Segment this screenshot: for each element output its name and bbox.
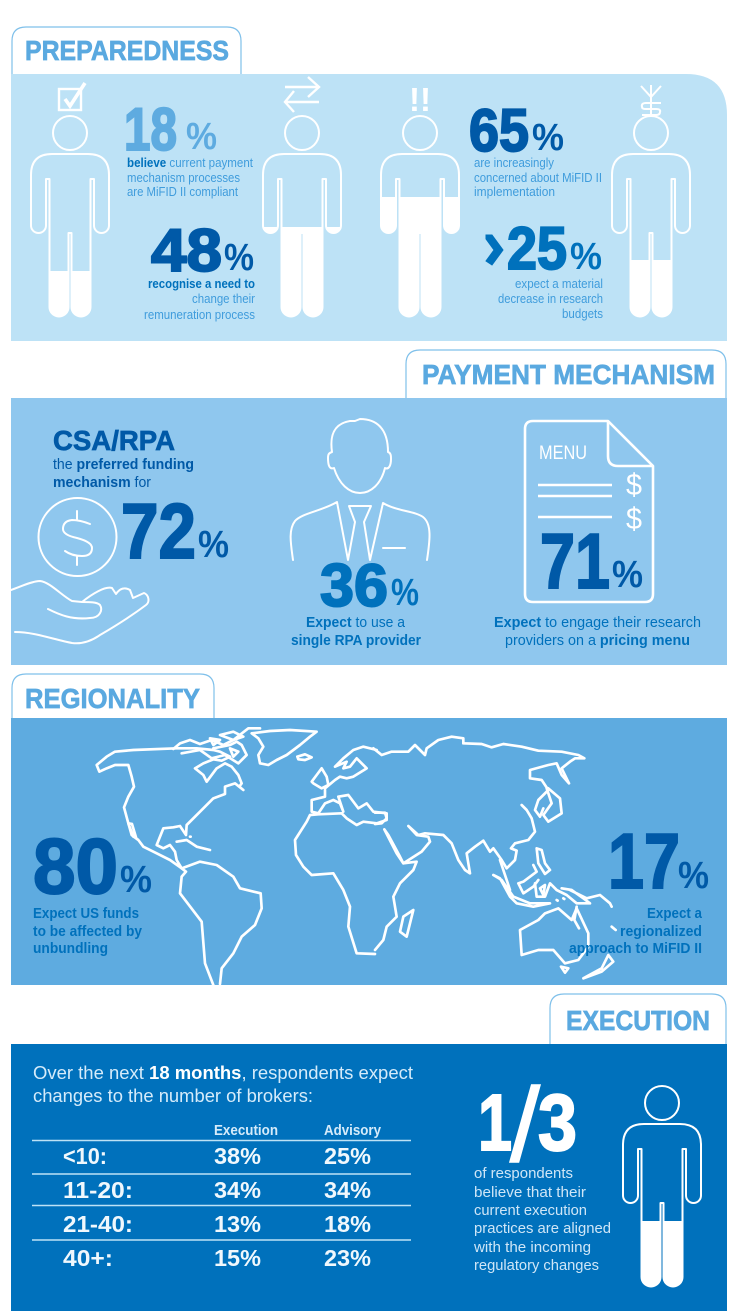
text: single RPA provider: single RPA provider xyxy=(291,633,421,649)
person 48 percent xyxy=(262,115,342,318)
stat: 36 percent xyxy=(320,552,419,619)
stat: greater than 25 percent xyxy=(486,215,602,282)
text: concerned xyxy=(474,155,602,199)
icon: exchange arrows xyxy=(285,77,319,112)
panel: payment mechanism xyxy=(11,350,727,665)
icon: businessman xyxy=(291,419,430,560)
table: broker changes: 18% xyxy=(324,1211,371,1237)
text: recognise: recognise a need to xyxy=(148,276,255,291)
table: broker changes: 23% xyxy=(324,1245,371,1271)
text: research budgets: expect a material xyxy=(515,276,603,291)
icon: menu document: $ xyxy=(626,467,642,502)
stat: 65 percent: % xyxy=(532,117,564,159)
text: intro: changes to the number of brokers: xyxy=(33,1085,313,1106)
stat: 65 percent: 65 xyxy=(469,97,529,164)
text: respondents: with the incoming xyxy=(473,1240,591,1256)
stat: 48 percent: 48 xyxy=(151,217,222,284)
text: regionalized approach: regionalized xyxy=(620,924,702,940)
stat: 71 percent: 71 xyxy=(540,517,610,605)
stat: greater than 25 percent: % xyxy=(570,236,602,278)
panel background: execution xyxy=(11,1044,727,1311)
icon: dollar coin xyxy=(38,498,116,576)
stat: 72 percent: % xyxy=(198,524,229,566)
icon: menu document xyxy=(525,421,653,602)
panel background: payment mechanism xyxy=(11,398,727,665)
text: pricing menu: providers on a pricing menu xyxy=(505,633,690,649)
stat: 80 percent: 80 xyxy=(33,822,118,910)
stat: 80 percent: % xyxy=(120,859,152,901)
table: broker changes: 34% xyxy=(324,1177,371,1203)
heading tab: preparedness xyxy=(12,27,241,75)
stat: greater than 25 percent: 25 xyxy=(507,215,567,282)
person one third xyxy=(622,1085,702,1288)
text: believe: believe current payment xyxy=(127,155,253,170)
text: believe: are MiFID II compliant xyxy=(127,184,238,199)
heading tab: regionality xyxy=(12,674,214,719)
table: broker changes: 34% xyxy=(214,1177,261,1203)
text: intro: Over the next 18 months, respondents expect xyxy=(33,1062,413,1083)
stat: one third xyxy=(478,1067,577,1184)
table: broker changes: 11-20: xyxy=(63,1177,133,1203)
text: concerned: implementation xyxy=(474,184,555,199)
text: believe: mechanism processes xyxy=(127,170,240,185)
stat: 48 percent: % xyxy=(224,237,254,279)
text: US funds: unbundling xyxy=(33,941,108,957)
table: broker changes: 15% xyxy=(214,1245,261,1271)
text: preferred funding xyxy=(53,457,194,491)
stat: 17 percent: 17 xyxy=(608,817,680,905)
icon: open hand xyxy=(11,581,148,643)
panel: preparedness xyxy=(11,27,727,341)
icon: dollar with down arrow xyxy=(641,85,661,115)
text: single RPA provider: Expect to use a xyxy=(306,615,406,631)
stat: 71 percent: % xyxy=(612,554,643,596)
text: research budgets xyxy=(498,276,603,321)
heading tab: regionality: REGIONALITY xyxy=(25,683,200,714)
table: broker changes: 13% xyxy=(214,1211,261,1237)
text: respondents: practices are aligned xyxy=(474,1221,611,1237)
panel background: preparedness xyxy=(11,74,727,341)
text: US funds: Expect US funds xyxy=(33,906,139,922)
text: recognise xyxy=(144,276,256,322)
text: pricing menu xyxy=(494,615,701,649)
stat: one third: 3 xyxy=(538,1078,577,1167)
heading tab: execution xyxy=(550,994,726,1045)
text: concerned: concerned about MiFID II xyxy=(474,170,602,185)
person greater than 25 percent xyxy=(611,116,691,318)
stat: 36 percent: 36 xyxy=(320,552,388,619)
stat: 17 percent: % xyxy=(678,855,709,897)
text: regionalized approach: Expect a xyxy=(647,906,703,922)
text: preferred funding: mechanism for xyxy=(53,475,151,491)
text: regionalized approach: approach to MiFID II xyxy=(569,941,702,957)
heading: CSA/RPA: CSA/RPA xyxy=(53,425,175,456)
text: pricing menu: Expect to engage their research xyxy=(494,615,701,631)
table: broker changes xyxy=(32,1123,411,1271)
table: broker changes: 38% xyxy=(214,1143,261,1169)
text: respondents xyxy=(473,1166,611,1274)
person 18 percent xyxy=(30,115,110,318)
icon: menu document: $ xyxy=(626,501,642,536)
stat: one third: / xyxy=(510,1067,541,1184)
stat: 18 percent: % xyxy=(186,116,217,158)
text: recognise: remuneration process xyxy=(144,307,255,322)
text: regionalized approach xyxy=(569,906,703,957)
text: respondents: regulatory changes xyxy=(474,1258,599,1274)
text: respondents: believe that their xyxy=(474,1185,586,1201)
table: broker changes: <10: xyxy=(63,1143,107,1169)
text: respondents: current execution xyxy=(474,1203,587,1219)
table: broker changes: 21-40: xyxy=(63,1211,133,1237)
person 65 percent xyxy=(380,115,460,318)
heading tab: execution: EXECUTION xyxy=(566,1005,710,1036)
text: US funds xyxy=(33,906,142,957)
text: research budgets: decrease in research xyxy=(498,291,603,306)
text: preferred funding: the preferred funding xyxy=(53,457,194,473)
text: respondents: of respondents xyxy=(474,1166,573,1182)
icon: menu document: MENU xyxy=(539,443,587,464)
stat: 36 percent: % xyxy=(391,572,419,614)
text: concerned: are increasingly xyxy=(474,155,554,170)
text: recognise: change their xyxy=(192,291,256,306)
stat: 18 percent: 18 xyxy=(124,96,177,163)
stat: 72 percent: 72 xyxy=(121,487,196,575)
stat: one third: 1 xyxy=(478,1078,512,1167)
heading tab: payment mechanism xyxy=(406,350,726,399)
table: broker changes: 40+: xyxy=(63,1245,113,1271)
panel: execution xyxy=(11,994,727,1311)
table: broker changes: Execution xyxy=(214,1123,278,1139)
icon: checkbox xyxy=(59,83,85,110)
text: single RPA provider xyxy=(291,615,421,649)
panel background: regionality xyxy=(11,718,727,985)
icon: exclamation marks: !! xyxy=(409,81,431,118)
table: broker changes: 25% xyxy=(324,1143,371,1169)
text: research budgets: budgets xyxy=(562,306,603,321)
stat: 48 percent xyxy=(151,217,254,284)
text: US funds: to be affected by xyxy=(33,924,142,940)
panel: regionality xyxy=(11,674,727,985)
text: believe xyxy=(127,155,253,199)
heading tab: payment mechanism: PAYMENT MECHANISM xyxy=(422,359,715,390)
table: broker changes: Advisory xyxy=(324,1123,381,1139)
heading tab: preparedness: PREPAREDNESS xyxy=(25,35,229,66)
text: intro xyxy=(33,1062,413,1106)
world map xyxy=(97,728,616,985)
